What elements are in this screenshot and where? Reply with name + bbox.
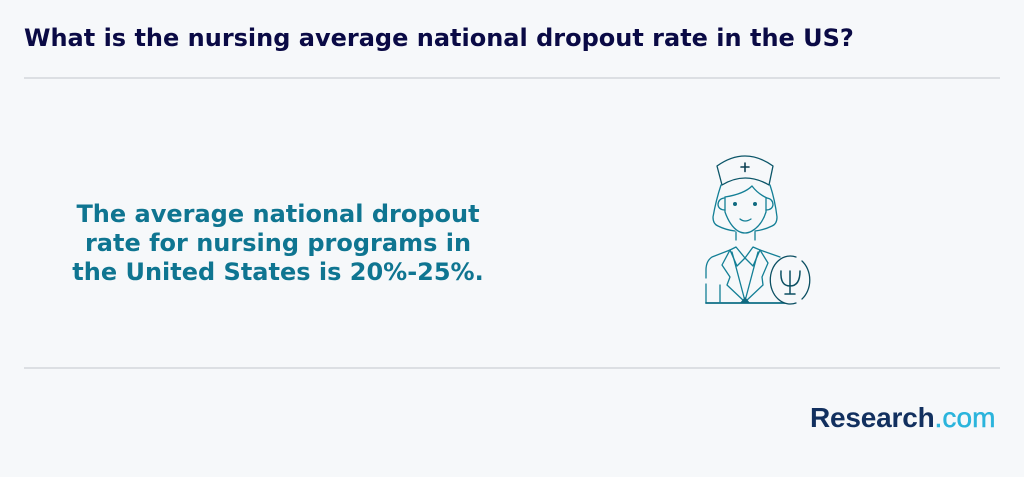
- key statement text: The average national dropout: [76, 200, 480, 228]
- key statement text: [72, 200, 484, 286]
- hair: [713, 185, 735, 231]
- logo: Research.com: Research.com: [810, 402, 996, 433]
- face: [725, 197, 766, 233]
- psychology badge: [770, 256, 810, 304]
- icon: nurse with psychology symbol: [705, 155, 810, 305]
- key statement text: the United States is 20%-25%.: [72, 258, 484, 286]
- uniform: [706, 250, 730, 303]
- key statement text: rate for nursing programs in: [85, 229, 471, 257]
- title: What is the nursing average national dropout rate in the US?: [24, 24, 854, 52]
- nurse cap: [717, 156, 773, 185]
